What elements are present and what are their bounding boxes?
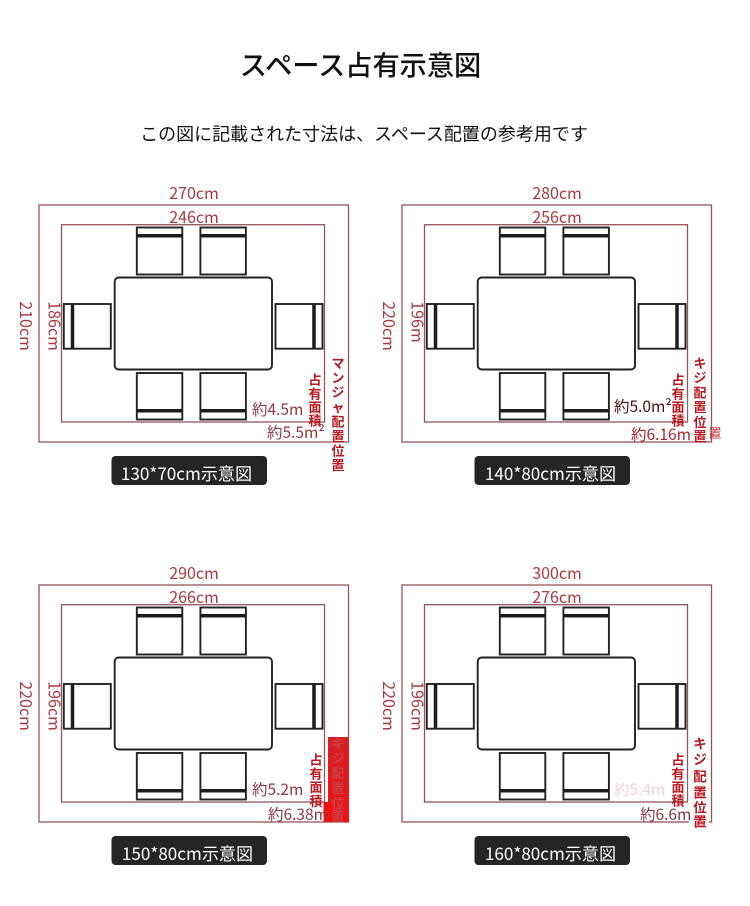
outer width label: 280cm xyxy=(532,180,582,204)
chair: left xyxy=(427,304,474,349)
chair: bottom right xyxy=(200,753,246,800)
chair: bottom left xyxy=(500,373,545,420)
placement vertical label: 置 xyxy=(693,782,707,802)
placement vertical label: 置 xyxy=(693,426,707,445)
occupied area vertical label: 積 xyxy=(308,410,322,430)
inner width label: 256cm xyxy=(532,204,582,228)
chair: bottom right xyxy=(563,753,609,800)
red placement highlight xyxy=(324,737,349,822)
placement vertical label: 配 xyxy=(331,411,345,430)
chair: top right xyxy=(200,228,246,274)
white patch behind area labels xyxy=(613,396,687,421)
outer height label: 220cm xyxy=(378,681,402,731)
placement vertical label: ン xyxy=(331,368,345,387)
outer width label: 290cm xyxy=(169,560,219,584)
inner area: 約5.2m xyxy=(252,778,303,800)
table xyxy=(115,658,272,750)
inner boundary xyxy=(62,225,324,422)
table xyxy=(115,278,272,370)
inner height label: 196cm xyxy=(44,681,68,731)
outer area: 約6.16m xyxy=(631,423,691,445)
placement vertical label: ャ xyxy=(331,397,345,416)
chair: left xyxy=(427,684,474,729)
panel: 160*80cm diagram xyxy=(378,560,712,865)
placement vertical label: 配 xyxy=(693,766,707,786)
occupied area vertical label: 有 xyxy=(671,764,685,782)
subtitle: この図に記載された寸法は、スペース配置の参考用です xyxy=(140,120,588,146)
faded placement vertical label: キ xyxy=(331,733,345,752)
placement vertical label: ジ xyxy=(331,382,345,401)
white patch behind area labels xyxy=(613,778,687,801)
caption button: 160*80cm示意図 xyxy=(485,840,616,865)
faded placement vertical label: 配 xyxy=(331,763,345,782)
placement vertical label: 位 xyxy=(331,441,345,460)
panel: 140*80cm diagram xyxy=(378,180,722,485)
title: スペース占有示意図 xyxy=(240,43,481,83)
outer boundary xyxy=(39,585,348,822)
inner boundary xyxy=(424,605,688,802)
outer area: 約5.5m² xyxy=(267,421,325,443)
inner width label: 246cm xyxy=(169,204,219,228)
panel: 130*70cm diagram xyxy=(15,180,348,485)
occupied area vertical label: 面 xyxy=(308,397,322,416)
chair: top right xyxy=(563,228,609,274)
chair: top right xyxy=(200,608,246,654)
chair: bottom left xyxy=(137,373,182,420)
table xyxy=(478,658,635,750)
inner area: 約5.0m² xyxy=(614,395,672,417)
faded placement vertical label: 置 xyxy=(331,806,345,825)
chair: bottom right xyxy=(563,373,609,420)
caption button: 140*80cm示意図 xyxy=(485,460,616,485)
placement vertical label: 置 xyxy=(693,397,707,416)
outer boundary xyxy=(402,205,712,442)
chair: top left xyxy=(137,608,182,654)
placement vertical label: 配 xyxy=(693,382,707,402)
caption button: 130*70cm示意図 xyxy=(121,460,252,485)
occupied area vertical label: 占 xyxy=(671,750,685,768)
placement vertical label: マ xyxy=(331,353,345,372)
occupied area vertical label: 積 xyxy=(309,791,323,810)
occupied area vertical label: 面 xyxy=(671,397,685,416)
inner height label: 196cm xyxy=(406,681,430,731)
chair: right xyxy=(276,304,322,349)
faded placement vertical label: ジ xyxy=(331,748,345,767)
placement vertical label: キ xyxy=(693,732,707,752)
occupied area vertical label: 面 xyxy=(671,777,685,796)
inner height label: 196m xyxy=(406,301,430,343)
chair: top left xyxy=(500,228,545,274)
placement vertical label: キ xyxy=(693,353,707,372)
chair: right xyxy=(276,684,322,729)
chair: left xyxy=(64,304,111,349)
chair: right xyxy=(638,304,686,349)
inner area: 約4.5m xyxy=(252,398,303,420)
occupied area vertical label: 占 xyxy=(308,370,322,388)
occupied area vertical label: 占 xyxy=(309,750,323,768)
placement vertical label: 置 xyxy=(331,455,345,474)
occupied area vertical label: 積 xyxy=(671,790,685,810)
occupied area vertical label: 積 xyxy=(671,410,685,430)
outer width label: 270cm xyxy=(169,180,219,204)
inner width label: 266cm xyxy=(169,584,219,608)
outer height label: 220cm xyxy=(15,681,39,731)
white patch behind placement label xyxy=(689,737,709,827)
table xyxy=(478,278,635,370)
outer height label: 220cm xyxy=(378,301,402,351)
outer area: 約6.38m xyxy=(268,803,328,825)
occupied area vertical label: 有 xyxy=(671,384,685,402)
white patch behind area labels xyxy=(251,398,324,421)
occupied area vertical label: 有 xyxy=(309,764,323,782)
chair: bottom right xyxy=(200,373,246,420)
placement vertical label: 位 xyxy=(693,412,707,431)
placement vertical label: 置 xyxy=(693,810,707,830)
placement vertical label: ジ xyxy=(693,368,707,386)
occupied area vertical label: 面 xyxy=(309,777,323,796)
inner area (faded): 約5.4m xyxy=(614,778,665,800)
inner boundary xyxy=(62,605,324,802)
chair: bottom left xyxy=(500,753,545,800)
outer boundary xyxy=(39,205,348,442)
outer height label: 210cm xyxy=(15,301,39,351)
faded placement vertical label: 置 xyxy=(331,778,345,797)
caption button: 150*80cm示意図 xyxy=(122,840,253,865)
placement vertical label: ジ xyxy=(693,748,707,768)
chair: top right xyxy=(563,608,609,654)
placement vertical label: 位 xyxy=(693,796,707,816)
panel: 150*80cm diagram xyxy=(15,560,349,865)
chair: top left xyxy=(137,228,182,274)
inner width label: 276cm xyxy=(532,584,582,608)
stray vertical label character: 置 xyxy=(708,423,722,442)
outer boundary xyxy=(402,585,712,822)
placement vertical label: 置 xyxy=(331,426,345,445)
inner boundary xyxy=(424,225,688,422)
occupied area vertical label: 占 xyxy=(671,370,685,388)
chair: top left xyxy=(500,608,545,654)
outer width label: 300cm xyxy=(532,560,582,584)
white patch behind area labels xyxy=(251,778,324,801)
chair: bottom left xyxy=(137,753,182,800)
occupied area vertical label: 有 xyxy=(308,384,322,402)
outer area: 約6.6m xyxy=(640,803,691,825)
chair: left xyxy=(64,684,111,729)
inner height label: 186cm xyxy=(44,301,68,351)
faded placement vertical label: 位 xyxy=(331,793,345,812)
chair: right xyxy=(638,684,686,729)
